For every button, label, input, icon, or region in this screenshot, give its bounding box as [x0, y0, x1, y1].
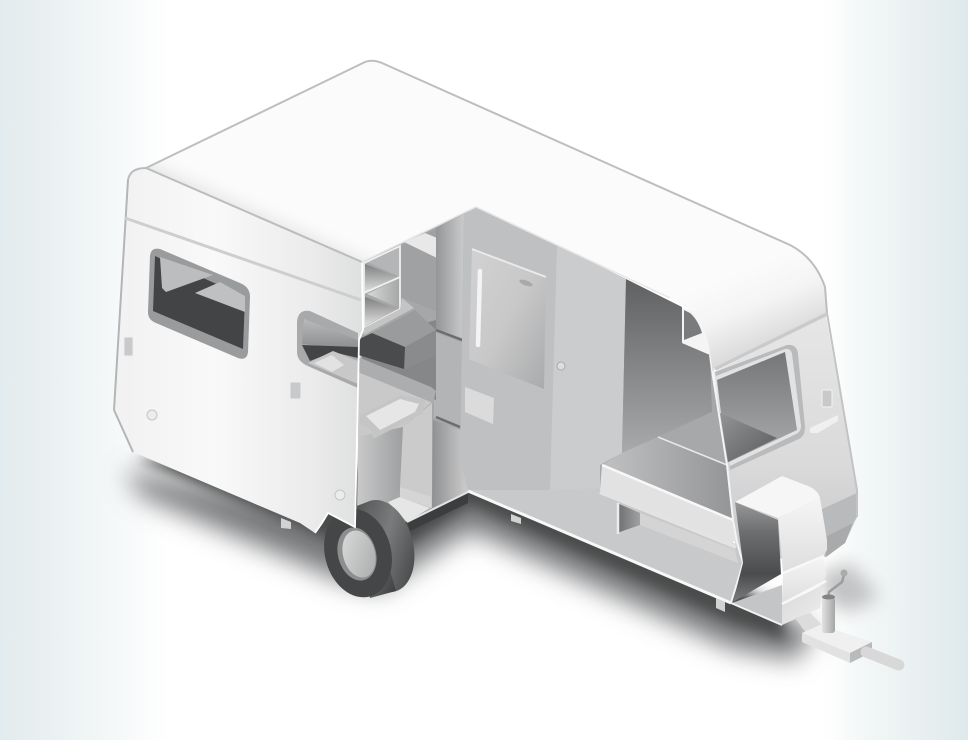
locker base edge	[731, 603, 782, 625]
crank knob	[840, 570, 848, 576]
cushion highlight	[602, 465, 733, 520]
jockey post	[822, 597, 835, 633]
floor right of cabinet	[432, 420, 468, 508]
lower cabinet left	[357, 427, 403, 514]
lid front upper	[778, 498, 827, 572]
lid front lower	[782, 585, 823, 625]
column divider upper	[436, 330, 462, 340]
roof outline	[146, 61, 827, 313]
interior: wall panels	[460, 207, 743, 612]
front handle	[810, 415, 838, 433]
floor step	[400, 487, 431, 508]
upper shelf back	[367, 246, 400, 277]
fridge top edge	[472, 249, 546, 277]
lower wall	[468, 488, 743, 603]
interior: dark alcove	[622, 279, 712, 453]
bed front	[405, 331, 436, 369]
shelf plate	[362, 298, 414, 335]
ground shadow	[125, 458, 880, 660]
foot 3	[716, 598, 725, 612]
front seat	[600, 437, 738, 563]
cut edge front	[710, 355, 743, 603]
front surface	[714, 316, 857, 560]
lid ribs	[782, 556, 826, 604]
knob 2	[335, 490, 345, 500]
lower cabinet column	[400, 403, 432, 508]
tire hull	[346, 501, 396, 598]
jockey cap	[822, 594, 835, 600]
wall behind bed	[362, 320, 436, 400]
interior: rear section	[342, 214, 468, 522]
seat divider	[658, 437, 727, 465]
shelf box outline	[364, 246, 400, 328]
wall stripe	[125, 218, 361, 300]
small panel	[465, 387, 494, 424]
hub	[337, 527, 381, 581]
upper shelf floor	[365, 264, 398, 293]
seat top	[602, 437, 733, 520]
lid front middle	[782, 557, 826, 603]
interior base	[358, 207, 731, 603]
column lower	[434, 332, 462, 428]
tire back	[342, 493, 424, 599]
fridge	[469, 249, 546, 389]
roof rear shade	[146, 154, 390, 262]
cushion strip	[600, 492, 736, 547]
roof cut edge	[362, 207, 670, 298]
front seam	[715, 314, 827, 369]
hub ring	[332, 523, 382, 585]
jockey crank	[828, 575, 844, 598]
seat base	[658, 412, 728, 462]
window 2	[297, 311, 358, 388]
alcove box	[682, 308, 710, 355]
locker floor	[732, 585, 782, 625]
wall outline	[114, 180, 133, 452]
floor edge	[407, 492, 468, 522]
fridge handle	[478, 271, 480, 345]
counter strip	[358, 357, 436, 403]
window 1	[148, 249, 250, 359]
hitch	[795, 570, 899, 665]
door knob	[557, 362, 565, 370]
latch 2	[290, 382, 301, 399]
lower band	[820, 493, 857, 538]
coupling tube	[866, 652, 899, 665]
latch 1	[124, 337, 133, 356]
floor plate	[388, 497, 430, 522]
drawbar top	[802, 624, 872, 653]
fridge badge	[519, 278, 533, 288]
knob 1	[147, 410, 157, 420]
under seat strip	[640, 513, 738, 563]
cushion front	[600, 465, 737, 545]
column upper	[436, 214, 464, 338]
drawbar neck	[795, 613, 822, 634]
sink	[360, 395, 425, 439]
seat leg	[617, 503, 640, 533]
splashback	[358, 372, 432, 437]
lower shelf floor	[365, 297, 398, 326]
front window glass	[717, 352, 797, 463]
front locker	[731, 476, 827, 625]
floor edge strip	[468, 491, 731, 603]
cut edge	[315, 262, 363, 533]
rear wall	[114, 168, 363, 533]
light ceiling strip	[404, 233, 437, 258]
lower shelf back	[367, 278, 400, 308]
wheel	[314, 493, 424, 605]
drawbar front	[802, 633, 850, 663]
front latch	[822, 390, 832, 407]
front outline	[827, 313, 857, 517]
roof	[128, 61, 827, 373]
roof rear edge	[128, 168, 362, 262]
back seat	[720, 413, 777, 462]
coupling end	[850, 642, 872, 663]
foot	[281, 518, 291, 529]
fridge wall	[460, 207, 557, 492]
locker cavity	[733, 502, 781, 602]
bed side dark	[342, 333, 405, 369]
bed top	[372, 310, 436, 347]
front window frame	[715, 345, 805, 470]
sink basin	[366, 399, 419, 430]
rear back wall	[400, 228, 438, 312]
column divider lower	[436, 417, 460, 427]
leg plate	[617, 503, 619, 534]
roof surface	[146, 61, 827, 373]
window inner trim	[716, 349, 801, 466]
front chamfer	[823, 523, 853, 557]
tire face	[314, 501, 402, 605]
wall surface	[114, 168, 363, 533]
foot 2	[511, 514, 521, 524]
door wall	[550, 244, 626, 530]
axle	[407, 494, 468, 531]
lid top	[735, 476, 820, 518]
front wall	[714, 313, 857, 560]
